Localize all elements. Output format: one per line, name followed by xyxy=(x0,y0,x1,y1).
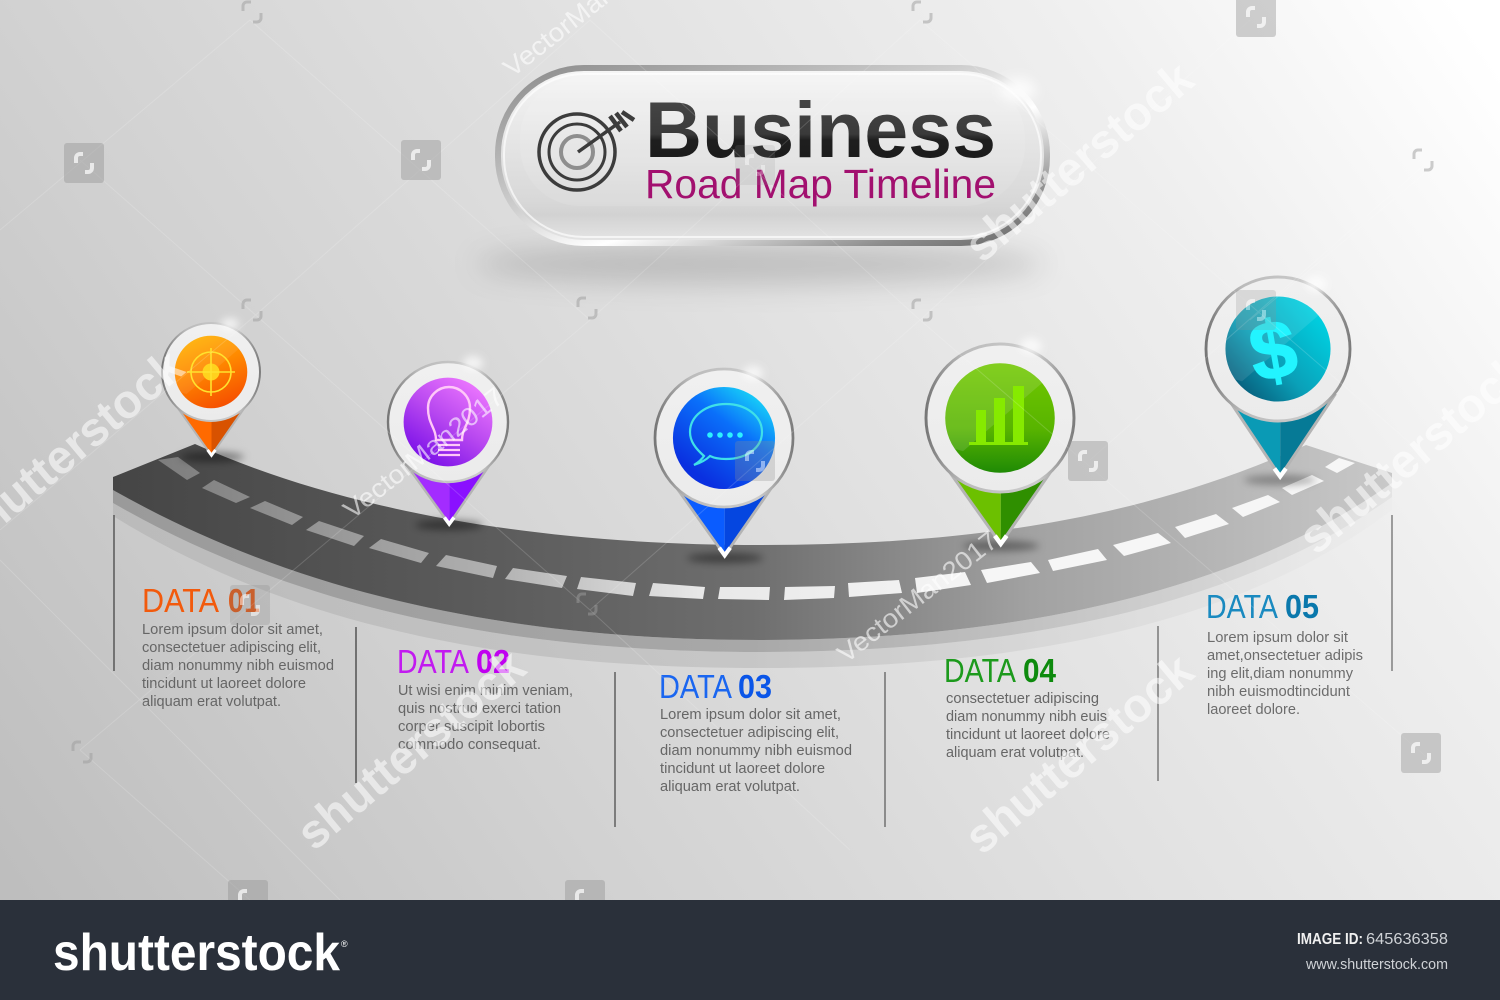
pin body xyxy=(1206,277,1350,476)
road xyxy=(113,444,1392,668)
pin shadow xyxy=(963,541,1039,551)
pin 2: purple bulb xyxy=(388,356,508,530)
road centre dashes xyxy=(158,457,1355,600)
image id number: 645636358 xyxy=(1366,931,1448,948)
icon: bar chart xyxy=(969,386,1028,445)
pin 5: teal dollar xyxy=(1206,276,1350,485)
image id: IMAGE ID: xyxy=(1297,931,1363,948)
heading label: DATA xyxy=(1206,588,1278,625)
icon: target with arrow xyxy=(539,112,634,190)
heading: Road Map Timeline: Road Map Timeline xyxy=(645,161,996,207)
pin glare xyxy=(1020,338,1042,354)
title badge xyxy=(475,68,1047,284)
body text: diam nonummy nibh euis xyxy=(946,709,1107,725)
heading number: 05 xyxy=(1285,588,1319,625)
pin body xyxy=(655,369,793,555)
body text xyxy=(142,622,334,710)
pill inner rim xyxy=(504,74,1041,237)
badge shadow xyxy=(475,244,1045,284)
heading: Business: Business xyxy=(645,85,996,174)
body text: Lorem ipsum dolor sit amet, xyxy=(660,707,841,723)
data block 01 xyxy=(142,582,334,710)
pin body xyxy=(926,344,1074,544)
pill gloss xyxy=(520,78,1025,206)
body text xyxy=(946,691,1110,761)
body text: Lorem ipsum dolor sit xyxy=(1207,630,1348,646)
body text: Ut wisi enim minim veniam, xyxy=(398,683,573,699)
heading number: 01 xyxy=(228,582,260,619)
road surface xyxy=(113,444,1392,640)
pin body xyxy=(162,323,260,455)
body text: corper suscipit lobortis xyxy=(398,719,545,735)
data block 02 xyxy=(397,643,573,753)
heading label: DATA xyxy=(659,668,732,705)
body text xyxy=(398,683,573,753)
body text: tincidunt ut laoreet dolore xyxy=(142,676,306,692)
pin glare xyxy=(743,366,763,380)
body text: aliquam erat volutpat. xyxy=(946,745,1084,761)
body text: aliquam erat volutpat. xyxy=(142,694,281,710)
body text: commodo consequat. xyxy=(398,737,541,753)
body text: consectetuer adipiscing elit, xyxy=(142,640,321,656)
icon: crosshair xyxy=(187,348,235,396)
pin 1: orange target xyxy=(162,318,260,462)
heading label: DATA xyxy=(944,652,1016,689)
pin 4: green bar chart xyxy=(926,338,1074,551)
watermark author names: VectorMan2017 xyxy=(831,525,1003,669)
body text: diam nonummy nibh euismod xyxy=(142,658,334,674)
pin 3: blue speech bubble xyxy=(655,366,793,563)
vertical divider lines xyxy=(114,515,1392,827)
body text: ing elit,diam nonummy xyxy=(1207,666,1354,682)
data block 03 xyxy=(659,668,852,795)
body text: Lorem ipsum dolor sit amet, xyxy=(142,622,323,638)
pin glare xyxy=(221,318,239,330)
body text: nibh euismodtincidunt xyxy=(1207,684,1350,700)
heading number: 03 xyxy=(738,668,772,705)
footer bar xyxy=(0,900,1500,1000)
data block 04 xyxy=(944,652,1110,761)
footer logo: shutterstock xyxy=(53,924,340,982)
watermark wordmarks: shutterstock xyxy=(287,640,536,860)
pin shadow xyxy=(415,520,483,530)
pin glare xyxy=(463,356,483,370)
heading label: DATA xyxy=(142,582,219,619)
body text xyxy=(660,707,852,795)
pin glare xyxy=(1305,276,1327,292)
heading label: DATA xyxy=(397,643,469,680)
data block 05 xyxy=(1206,588,1363,718)
body text: quis nostrud exerci tation xyxy=(398,701,561,717)
body text xyxy=(1207,630,1363,718)
site url: www.shutterstock.com xyxy=(1305,957,1448,973)
footer background xyxy=(0,900,1500,1000)
body text: consectetuer adipiscing xyxy=(946,691,1099,707)
body text: laoreet dolore. xyxy=(1207,702,1300,718)
road upper side band xyxy=(113,483,1392,652)
icon: light bulb xyxy=(428,387,470,455)
watermark wordmarks: shutterstock xyxy=(955,644,1204,864)
heading number: 02 xyxy=(476,643,510,680)
heading number: 04 xyxy=(1023,652,1057,689)
pin body xyxy=(388,362,508,524)
body text: consectetuer adipiscing elit, xyxy=(660,725,839,741)
pin shadow xyxy=(1244,475,1316,485)
registered mark: ® xyxy=(341,939,348,949)
pin shadow xyxy=(180,452,244,462)
body text: tincidunt ut laoreet dolore xyxy=(660,761,825,777)
icon: speech bubble xyxy=(690,404,762,465)
glass pill xyxy=(498,68,1047,243)
body text: amet,onsectetuer adipis xyxy=(1207,648,1363,664)
body text: aliquam erat volutpat. xyxy=(660,779,800,795)
road lower side band xyxy=(113,497,1392,668)
watermark author names: VectorMan2017 xyxy=(337,381,509,525)
body text: diam nonummy nibh euismod xyxy=(660,743,852,759)
watermark author names xyxy=(337,0,1003,669)
pill glare xyxy=(1000,78,1036,102)
icon: dollar sign: $ xyxy=(1243,302,1304,400)
watermark wordmarks: shutterstock xyxy=(955,52,1204,272)
body text: tincidunt ut laoreet dolore xyxy=(946,727,1110,743)
pin shadow xyxy=(687,553,763,563)
